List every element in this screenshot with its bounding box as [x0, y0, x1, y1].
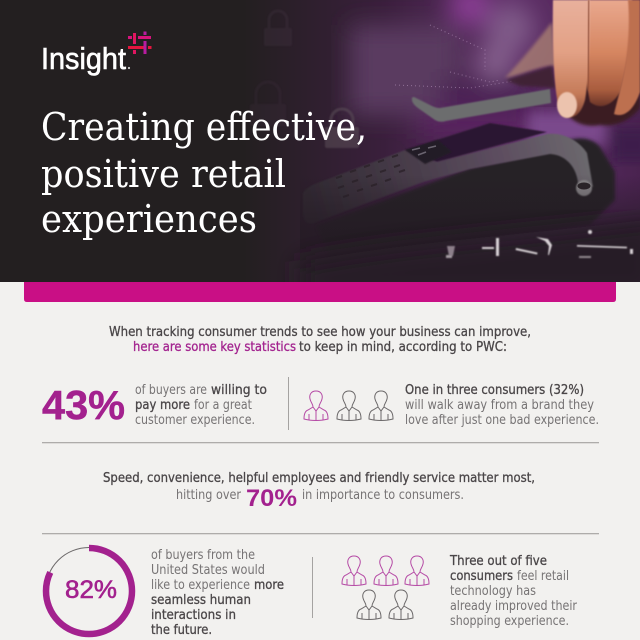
ring chart: 82%: 82% [65, 576, 117, 604]
stat: one in three consumers: will walk away from a brand they [405, 398, 594, 413]
stat: 82% text: interactions in [151, 608, 236, 623]
middle finger [584, 0, 632, 106]
intro text: to keep in mind, according to PWC: [299, 340, 507, 355]
stat: one in three consumers [405, 383, 599, 428]
stat: three out of five consumers: Three out of five [449, 554, 547, 569]
stat: 82% text: of buyers from the [151, 548, 255, 563]
title [41, 105, 367, 241]
stat: 43%: of buyers are [135, 383, 207, 398]
title: experiences [41, 197, 257, 241]
lower fade [305, 181, 640, 250]
stat: 70% importance: in importance to consumers. [302, 488, 464, 503]
vertical divider [312, 557, 313, 618]
stat: 43% [42, 382, 267, 428]
terminal body [352, 136, 616, 238]
intro text [109, 325, 531, 355]
terminal keypad surface and rim [304, 133, 594, 214]
stat: three out of five consumers: consumers [450, 569, 513, 584]
vertical divider [288, 377, 289, 430]
stat: 43%: willing to [211, 383, 267, 398]
hand shadow [566, 60, 640, 126]
stat: one in three consumers: One in three consumers (32%) [405, 383, 584, 398]
terminal screen [405, 123, 547, 162]
stat: 82% text: the future. [151, 623, 212, 638]
hero photo: payment terminal and hand [0, 0, 640, 300]
stat: 43%: pay more [135, 398, 190, 413]
stat: three out of five consumers: feel retail [517, 569, 569, 584]
magenta banner bar [24, 282, 616, 302]
index finger [553, 0, 590, 117]
stat: three out of five consumers: already improved their [450, 599, 578, 614]
card [412, 89, 551, 122]
stat: 43%: for a great [194, 398, 252, 413]
thumb [505, 22, 556, 78]
icons: one in three people [304, 391, 393, 420]
title: positive retail [41, 152, 286, 196]
icons: three of five people [342, 556, 429, 620]
stat: 70% importance: 70% [246, 485, 297, 512]
intro text: here are some key statistics [133, 340, 296, 355]
logo: Insight [41, 32, 152, 76]
intro text: When tracking consumer trends to see how your business can improve, [109, 325, 531, 340]
stat: three out of five consumers: technology has [450, 584, 536, 599]
stat: three out of five consumers [449, 554, 578, 629]
stat: 43%: customer experience. [135, 413, 255, 428]
ring finger [614, 0, 640, 115]
stat: 43%: 43% [42, 382, 125, 428]
stat: 82% text: more [254, 578, 284, 593]
stat: 82% text: like to experience [151, 578, 250, 593]
stat: 70% importance [103, 471, 535, 512]
stat: 82% text [151, 548, 284, 638]
stat: 82% text: seamless human [151, 593, 251, 608]
stat: 82% text: United States would [151, 563, 265, 578]
terminal mini display [405, 140, 452, 164]
title: Creating effective, [41, 105, 367, 149]
logo: Insight: Insight [41, 42, 126, 76]
stat: 70% importance: Speed, convenience, helpful employees and friendly service matter most, [103, 471, 535, 486]
stat: one in three consumers: love after just one bad experience. [405, 413, 599, 428]
stat: three out of five consumers: shopping experience. [450, 614, 569, 629]
stat: 70% importance: hitting over [176, 488, 242, 503]
ring chart: 82% [46, 548, 132, 634]
